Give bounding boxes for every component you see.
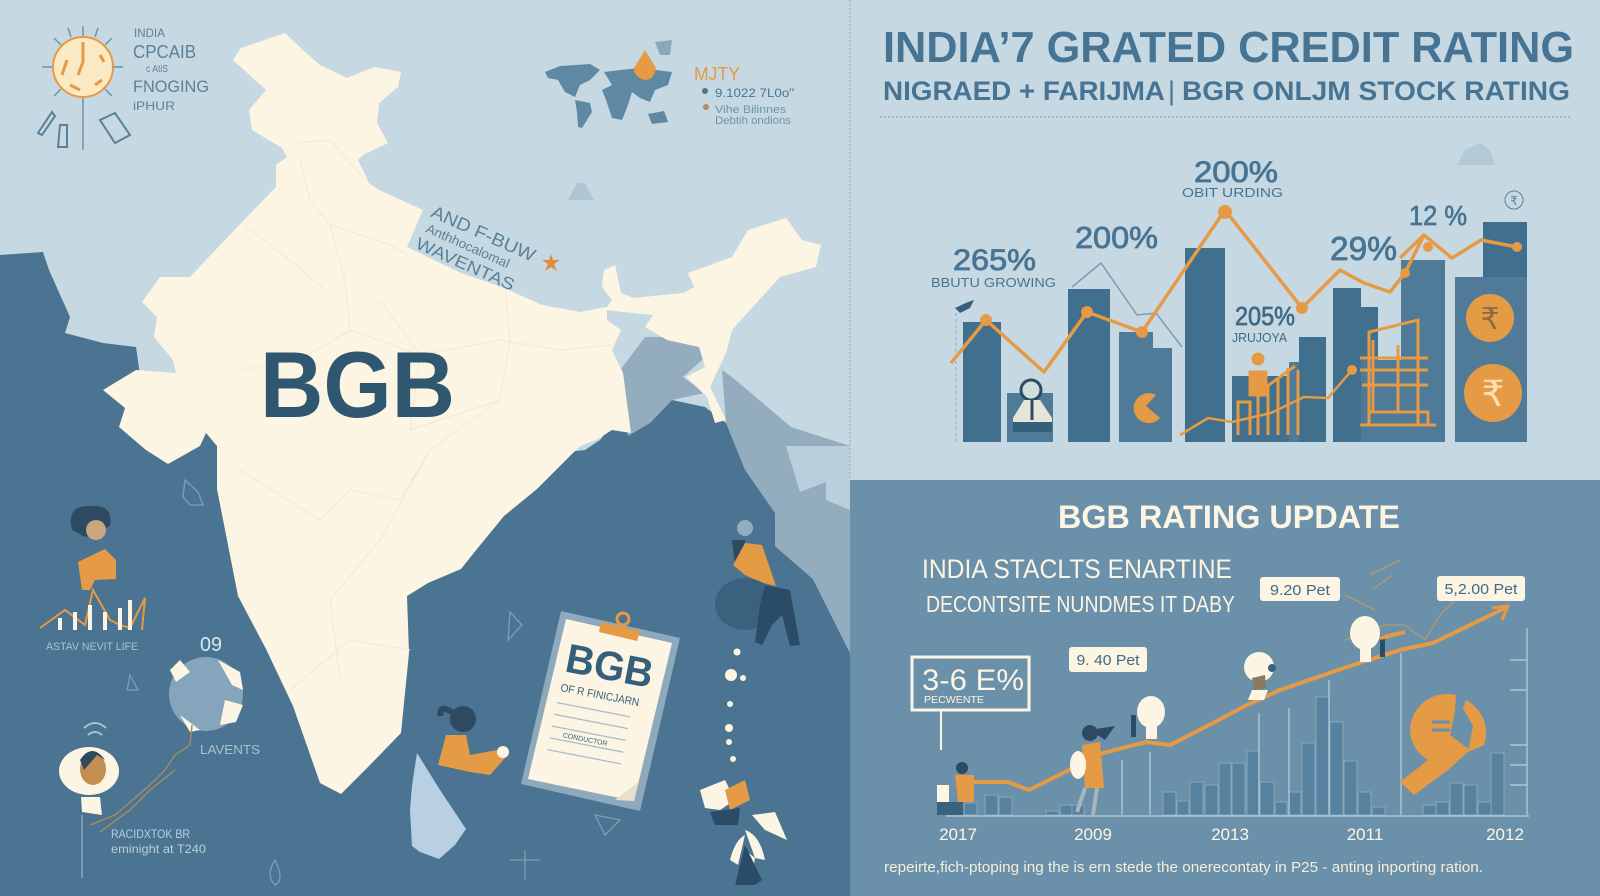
- text block: panel subhead: DECONTSITE NUNDMES IT DABY: [926, 591, 1235, 617]
- panel: map of India: [0, 33, 850, 896]
- state borders: [240, 140, 612, 690]
- axis stub: [955, 313, 957, 442]
- Sri Lanka: [410, 753, 466, 859]
- timeline year labels: 2013: [1211, 825, 1249, 844]
- stat: 200% top: 200%: [1194, 156, 1278, 189]
- timeline year labels: 2012: [1486, 825, 1524, 844]
- text block: panel subhead: [922, 554, 1235, 617]
- callout: percent box: [912, 657, 1029, 750]
- icon: orange star: [542, 254, 560, 271]
- text block: bottom-left caption: RACIDXTOK BR: [111, 827, 190, 841]
- text block: angled note: Anthhocalomal: [424, 221, 512, 271]
- stat: 265%: BBUTU GROWING: [931, 275, 1056, 290]
- text block: top-left note: CPCAIB: [133, 42, 196, 62]
- stat: 265%: 265%: [953, 244, 1036, 277]
- stat: 12%: 12 %: [1409, 200, 1467, 231]
- label: digits: 09: [200, 634, 222, 656]
- thin sketch lines near arrow: [1345, 560, 1455, 640]
- clipboard report: CONDUCTOR: [562, 732, 608, 748]
- figure: seated reader: [937, 762, 974, 815]
- timeline year labels: 2017: [939, 825, 977, 844]
- trend markers: [980, 205, 1522, 375]
- text block: angled note: [413, 201, 539, 297]
- stat: 205%: JRUJOYA: [1232, 330, 1287, 345]
- icon: rupee coin lower: [1464, 364, 1522, 422]
- icon: person in circle with signal: [59, 723, 119, 878]
- icon: orange building: [1360, 320, 1436, 425]
- heading: subtitle: |: [1168, 76, 1175, 106]
- icon: faint mountain: [568, 183, 594, 200]
- icon: rupee coin lower: ₹: [1482, 373, 1504, 414]
- text block: bottom-left caption: [111, 827, 206, 856]
- stat: 200% top: [1182, 156, 1283, 200]
- figure: head three: [1350, 616, 1405, 662]
- decoration: faint chalk sketches: [127, 480, 620, 885]
- timeline axis and verticals: [946, 628, 1529, 816]
- orange growth arrow: [974, 606, 1508, 790]
- text block: top map legend: MJTY: [694, 64, 740, 84]
- icon: small pie coin: [1134, 393, 1160, 423]
- callout: value three: [1437, 576, 1525, 601]
- text block: angled note: WAVENTAS: [413, 234, 517, 295]
- callout: value three: 5,2.00 Pet: [1444, 581, 1518, 598]
- callout: value one: 9. 40 Pet: [1076, 652, 1140, 669]
- divider: panel seam: [849, 0, 851, 480]
- figure: reaching woman: [438, 706, 509, 775]
- stat: 265%: [931, 244, 1056, 290]
- text block: top map legend: 9.1022 7L0o": [715, 86, 794, 100]
- stat: 200% left: 200%: [1075, 220, 1158, 255]
- text block: panel subhead: INDIA STACLTS ENARTINE: [922, 554, 1232, 584]
- map label: BGB: BGB: [260, 332, 455, 437]
- lower orange line: [1180, 370, 1352, 435]
- figure: climbing woman: [1070, 725, 1115, 815]
- callout: percent box: PECWENTE: [924, 695, 984, 706]
- timeline year labels: 2011: [1347, 825, 1383, 844]
- thin grey trend line: [1072, 263, 1182, 347]
- text block: top map legend: [694, 64, 794, 127]
- text block: top-left note: [133, 26, 209, 113]
- callout: value two: [1260, 577, 1340, 601]
- label: figure caption one: ASTAV NEVIT LIFE: [46, 641, 138, 653]
- stat: 205%: 205%: [1235, 301, 1295, 331]
- icon: rupee coin upper: [1466, 294, 1514, 342]
- figure: person with papers: [700, 780, 787, 885]
- icon: dark marker: [955, 300, 974, 313]
- figure: head two: [1244, 652, 1276, 700]
- heading: subtitle: [883, 76, 1570, 106]
- text block: top-left note: c AtiS: [146, 64, 168, 75]
- text block: top map legend: Debtih ondions: [715, 115, 792, 127]
- text block: top map legend: Vihe Bilinnes: [715, 104, 787, 116]
- figure: head one: [1131, 696, 1165, 739]
- ocean: [0, 252, 850, 896]
- callout: value one: [1069, 647, 1147, 672]
- icon: faint cloud: [1457, 143, 1495, 165]
- decoration: falling dots: [725, 648, 746, 762]
- text block: top-left note: iPHUR: [133, 99, 175, 113]
- stat: 29%: 29%: [1330, 230, 1397, 267]
- clipboard report: [521, 611, 680, 811]
- icon: rupee coin upper: ₹: [1480, 303, 1500, 336]
- callout: value two: 9.20 Pet: [1270, 582, 1331, 599]
- clipboard report: BGB: [562, 635, 657, 697]
- icon: woman with chart: [40, 506, 145, 630]
- icon: small circle mark: [1505, 191, 1523, 209]
- timeline year labels: 2009: [1074, 825, 1112, 844]
- neighbouring land: south-east: [722, 370, 850, 653]
- clipboard report: OF R FINICJARN: [559, 682, 640, 709]
- icon: globe: [169, 657, 243, 732]
- timeline year labels: [939, 825, 1524, 844]
- heading: subtitle: BGR ONLJM STOCK RATING: [1182, 76, 1570, 106]
- text block: bottom-left caption: eminight at T240: [111, 842, 206, 856]
- icon: portrait: [1013, 380, 1052, 432]
- text block: angled note: AND F-BUW: [428, 202, 539, 265]
- icon: orange rupee wrench: [1400, 694, 1486, 795]
- icon: sun clock with tools: [38, 26, 130, 150]
- footnote: repeirte,fich-ptoping ing the is ern stede the onerecontaty in P25 - anting inporting ration.: [884, 859, 1483, 876]
- stat: 205%: [1232, 301, 1295, 345]
- India landmass: [103, 33, 821, 794]
- icon: small circle mark: ₹: [1510, 194, 1518, 208]
- timeline bars: [964, 697, 1504, 815]
- text block: top-left note: FNOGING: [133, 77, 209, 96]
- label: lavents: LAVENTS: [200, 742, 260, 757]
- heading: subtitle: NIGRAED + FARIJMA: [883, 76, 1165, 106]
- heading: main title: INDIA’7 GRATED CREDIT RATING: [883, 23, 1574, 72]
- icon: person on orange bars: [1238, 354, 1298, 435]
- bar chart: ratings: [951, 191, 1527, 442]
- figure: seated person: [715, 520, 800, 646]
- text block: top-left note: INDIA: [134, 26, 165, 40]
- bars: [963, 222, 1527, 442]
- stat: 200% top: OBIT URDING: [1182, 185, 1283, 200]
- icon: world map with marker: [545, 40, 672, 128]
- panel: BGB rating update: [850, 480, 1600, 896]
- heading: panel title: BGB RATING UPDATE: [1058, 499, 1400, 535]
- neighbouring land: east: [618, 337, 710, 436]
- orange trend line: [951, 210, 1517, 372]
- line chart: zig-zag growth: [90, 725, 192, 832]
- pale land: far east: [786, 446, 850, 510]
- callout: percent box: 3-6 E%: [922, 664, 1024, 697]
